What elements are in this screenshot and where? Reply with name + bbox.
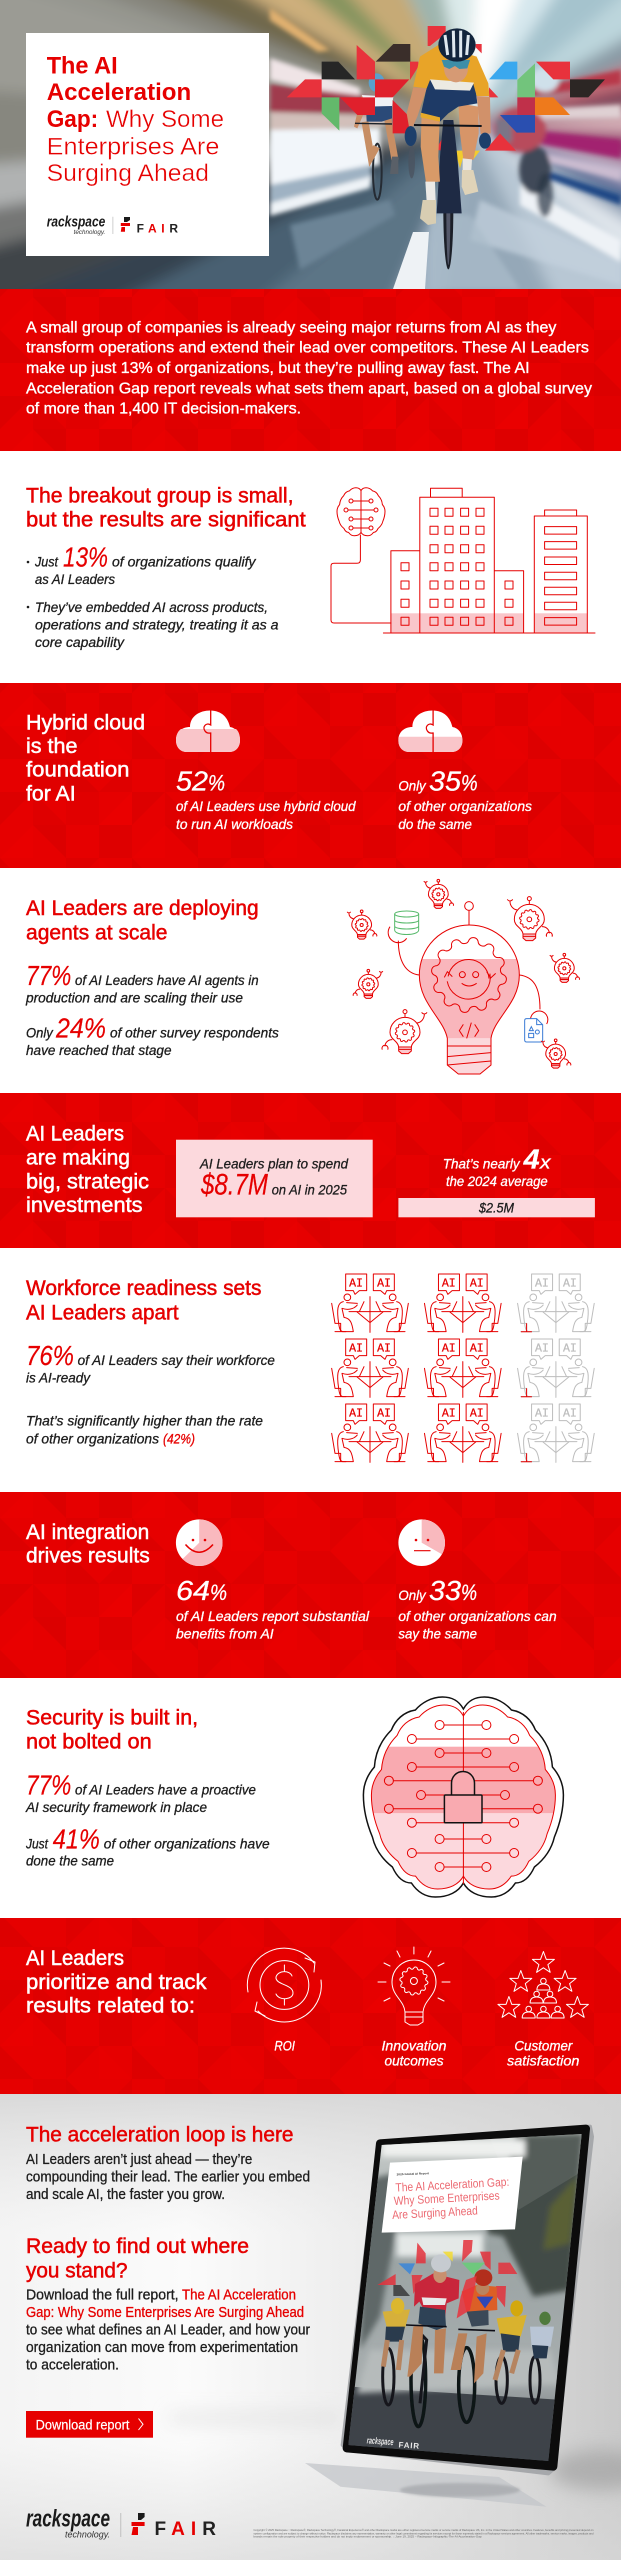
- logos: Rackspace and FAIR: F AI R: [137, 221, 178, 235]
- heading: ready: you stand?: [26, 2259, 128, 2282]
- row 3: AI: [563, 1408, 577, 1421]
- label: customer satisfaction: Customer: [514, 2038, 574, 2054]
- heading: The breakout group is small,: [26, 485, 293, 508]
- row 2: [332, 1339, 594, 1397]
- icon: buildings connected to brain: [331, 488, 595, 633]
- icon: ROI: [247, 1948, 321, 2022]
- row 2: AI: [442, 1343, 456, 1356]
- paragraph: download: organization can move from experimentation: [26, 2340, 298, 2356]
- callout: nearly 4x the 2024 average: [398, 1143, 595, 1217]
- callout: nearly 4x the 2024 average: x: [539, 1152, 552, 1172]
- callout: 8.7M spend: [176, 1140, 373, 1217]
- logos: Rackspace and FAIR: [47, 215, 178, 236]
- stats text: production and are scaling their use: [25, 990, 243, 1006]
- paragraph: download: The AI Acceleration: [182, 2287, 296, 2303]
- bullet list: core capability: [35, 634, 125, 650]
- stat: 52 percent: 52: [176, 766, 208, 797]
- icon: puzzle cloud 52%: [176, 710, 240, 752]
- heading: ready: Ready to find out where: [26, 2235, 249, 2258]
- paragraph: download: Gap: Why Some Enterprises Are Surging Ahead: [26, 2305, 304, 2321]
- heading: ready: [26, 2235, 249, 2282]
- report title card: 2025 Global AI Report: [397, 2171, 429, 2176]
- stats text: have reached that stage: [26, 1042, 172, 1058]
- background rider: left: [354, 73, 415, 200]
- heading: [26, 485, 306, 532]
- stat: 52 percent: [176, 766, 357, 832]
- logos: Rackspace and FAIR: rackspace: [47, 215, 105, 231]
- legal fine print: Copyright © 2025 Rackspace :: Rackspace®, Rackspace Technology®, Fanatical Experience® and other Rackspace marks are either registered service marks or service marks of Rackspace US, Inc. in the United States and other countries. Features, benefits and pricing presented depend on: [254, 2529, 594, 2532]
- stats text: AI security framework in place: [25, 1799, 207, 1815]
- row 1: AI: [470, 1278, 484, 1291]
- row 1: AI: [349, 1278, 363, 1291]
- stats text: (42%): [163, 1430, 195, 1446]
- report title card: The AI Acceleration Gap:: [395, 2175, 510, 2195]
- stats text: Just: [25, 1835, 49, 1851]
- stat: only 35 percent: 35: [429, 766, 461, 797]
- heading: AI integration: [26, 1521, 149, 1544]
- row 2: AI: [563, 1343, 577, 1356]
- heading: Security is built in,: [26, 1706, 198, 1729]
- white road stripe: [393, 232, 429, 289]
- stat: only 33 percent: Only: [398, 1587, 427, 1603]
- report title card: [382, 2157, 523, 2233]
- motion-blur background rays: [0, 0, 621, 310]
- paragraph: download: Download the full report,: [26, 2287, 179, 2303]
- stats text: is AI-ready: [26, 1370, 91, 1386]
- panel: acceleration loop and download: [0, 2094, 621, 2560]
- logos: Rackspace and FAIR: technology.: [74, 230, 105, 236]
- title text: Acceleration: [47, 79, 191, 106]
- stats text: 77%: [26, 960, 71, 991]
- stats text: That’s significantly higher than the rate: [26, 1413, 263, 1429]
- stat: only 33 percent: say the same: [398, 1626, 477, 1642]
- panel: workforce readiness: [0, 1248, 621, 1492]
- heading: big, strategic: [26, 1170, 149, 1193]
- panel: breakout group: [0, 451, 621, 683]
- title text: Enterprises Are: [47, 133, 219, 160]
- label: customer satisfaction: satisfaction: [507, 2053, 580, 2069]
- intro paragraph: transform operations and extend their lead over competitors. These AI Leaders: [26, 340, 589, 357]
- mid-left and right blurred crowd streaks: [270, 8, 621, 289]
- stats text: 77%: [26, 1769, 71, 1800]
- row 2: AI: [377, 1343, 391, 1356]
- stat: 52 percent: %: [208, 771, 225, 796]
- icon: database: [395, 911, 419, 934]
- title text: Surging Ahead: [47, 160, 209, 187]
- stats text: of other organizations: [26, 1430, 159, 1446]
- stat: 64 percent: of AI Leaders report substantial: [176, 1608, 370, 1624]
- panel: security: [25, 1696, 564, 1898]
- callout: 8.7M spend: on AI in 2025: [272, 1181, 347, 1197]
- row 3: AI: [377, 1408, 391, 1421]
- title text: [47, 52, 224, 187]
- heading: AI Leaders are deploying: [26, 897, 259, 920]
- stats text: of other survey respondents: [110, 1025, 279, 1041]
- heading: results related to:: [26, 1995, 195, 2018]
- legal fine print: brands remain the sole property of their respective holders and do not imply endorsement or sponsorship. :: June 19, 2025 – Rackspace-Infographic-The-AI-Acceleration-Gap: [254, 2536, 482, 2539]
- stat: only 35 percent: [398, 766, 532, 832]
- padlock: [444, 1772, 482, 1823]
- heading: acceleration loop: The acceleration loop is here: [26, 2123, 294, 2146]
- callout: nearly 4x the 2024 average: the 2024 average: [446, 1173, 548, 1189]
- heading: AI Leaders: [26, 1122, 124, 1145]
- label: ROI: ROI: [274, 2038, 295, 2054]
- heading: foundation: [26, 759, 130, 782]
- stat: only 35 percent: do the same: [398, 816, 472, 832]
- bar: 2.5M: $2.5M: [478, 1199, 514, 1215]
- button: download report: [26, 2411, 153, 2438]
- row 1: AI: [535, 1278, 549, 1291]
- stats text: of other organizations have: [104, 1835, 270, 1851]
- small agent bulbs: [347, 879, 580, 1068]
- stats text: of AI Leaders have AI agents in: [75, 972, 259, 988]
- title card: [26, 33, 269, 256]
- heading: AI Leaders: [26, 1947, 124, 1970]
- bullet list: 13%: [63, 542, 108, 572]
- stat: only 35 percent: Only: [398, 778, 427, 794]
- heading: [26, 711, 145, 806]
- bar: 2.5M: [398, 1198, 595, 1217]
- intro paragraph: [26, 320, 592, 417]
- row 1: AI: [377, 1278, 391, 1291]
- stats text: [25, 1769, 270, 1869]
- bullet list: They’ve embedded AI across products,: [35, 599, 268, 615]
- bullet list: Just: [34, 554, 59, 570]
- heading: Hybrid cloud: [26, 711, 145, 734]
- stats text: of AI Leaders say their workforce: [78, 1352, 275, 1368]
- icon: innovation bulb: [378, 1947, 450, 2025]
- stat: 64 percent: %: [210, 1580, 227, 1605]
- panel: investments: [0, 1093, 621, 1248]
- icon: lightbulb with agents: [347, 879, 580, 1075]
- back riders: [383, 2298, 554, 2405]
- icon: customer satisfaction stars: [498, 1952, 588, 2018]
- heading: [26, 1277, 261, 1324]
- icon: document: [525, 1019, 543, 1042]
- bullet list: of organizations qualify: [112, 554, 256, 570]
- icon: neutral pie face 33%: [398, 1519, 445, 1566]
- mosaic accent shapes: [377, 2240, 517, 2307]
- heading: [26, 1947, 207, 2018]
- stat: only 35 percent: of other organizations: [398, 798, 532, 814]
- title text: Gap:: [47, 106, 98, 133]
- stat: 64 percent: benefits from AI: [176, 1626, 274, 1642]
- bullet list: operations and strategy, treating it as a: [35, 617, 279, 633]
- bullet list: as AI Leaders: [35, 571, 115, 587]
- callout: nearly 4x the 2024 average: 4: [523, 1143, 540, 1174]
- row 1: AI: [563, 1278, 577, 1291]
- stat: only 33 percent: %: [461, 1580, 477, 1605]
- label: innovation outcomes: Innovation: [382, 2038, 447, 2054]
- row 1: [332, 1274, 594, 1332]
- report cover image: [343, 2130, 587, 2463]
- heading: investments: [26, 1194, 143, 1217]
- stat: 52 percent: to run AI workloads: [176, 816, 293, 832]
- stat: only 35 percent: %: [461, 771, 478, 796]
- paragraph: download: to acceleration.: [26, 2357, 119, 2373]
- paragraph: download: [26, 2287, 310, 2373]
- icon: smiling pie face 64%: [176, 1519, 223, 1566]
- road: [343, 2387, 563, 2463]
- label: innovation outcomes: outcomes: [384, 2053, 444, 2069]
- stats text: done the same: [26, 1853, 114, 1869]
- report logos: FAIR: [398, 2440, 420, 2451]
- heading: agents at scale: [26, 921, 168, 944]
- report title card: Are Surging Ahead: [392, 2204, 478, 2222]
- icon: brain with padlock: [360, 1697, 570, 1903]
- panel: intro: [0, 289, 621, 451]
- tablet device with report cover: [343, 2127, 592, 2473]
- heading: [26, 1706, 198, 1754]
- row 2: AI: [470, 1343, 484, 1356]
- heading: [26, 897, 259, 944]
- mosaic accent shapes: [287, 26, 605, 168]
- tablet floor shadow: [170, 2412, 621, 2507]
- intro paragraph: make up just 13% of organizations, but they’re pulling away fast. The AI: [26, 360, 530, 377]
- title text: The AI: [47, 52, 118, 79]
- row 3: AI: [535, 1408, 549, 1421]
- heading: AI Leaders apart: [26, 1301, 179, 1324]
- icon grid: 6 of 9 meeting pairs highlighted: [332, 1274, 594, 1462]
- button: download report: Download report: [36, 2417, 130, 2432]
- callout: nearly 4x the 2024 average: That’s nearly: [443, 1155, 521, 1171]
- heading: [26, 1122, 149, 1217]
- stat: only 33 percent: of other organizations can: [398, 1608, 557, 1624]
- stats text: [26, 1340, 275, 1446]
- paragraph: [26, 2152, 310, 2203]
- panel: hybrid cloud: [0, 683, 621, 868]
- stats text: 76%: [26, 1340, 74, 1371]
- row 3: AI: [442, 1408, 456, 1421]
- panel: priorities: [0, 1918, 621, 2094]
- legal fine print: system configuration and are subject to change without notice. Rackspace disclaims any representation, warranty or other legal commitment regarding its services except for those expressly stated in a Rackspace services agreement. All other trademarks, service marks, images, products and: [254, 2532, 594, 2535]
- row 2: AI: [349, 1343, 363, 1356]
- callout: 8.7M spend: $8.7M: [200, 1168, 268, 1201]
- footer logos: Rackspace and FAIR: [26, 2506, 216, 2540]
- heading: is the: [26, 735, 78, 758]
- heading: for AI: [26, 783, 76, 806]
- paragraph: and scale AI, the faster you grow.: [26, 2187, 225, 2203]
- trees: [360, 2133, 583, 2350]
- report title card: Why Some Enterprises: [393, 2188, 500, 2208]
- stat: only 33 percent: [398, 1575, 557, 1642]
- paragraph: AI Leaders aren’t just ahead — they’re: [26, 2152, 252, 2168]
- row 1: AI: [442, 1278, 456, 1291]
- front riders: [406, 2254, 497, 2427]
- stats text: 24%: [55, 1013, 106, 1044]
- heading: but the results are significant: [26, 509, 306, 532]
- intro paragraph: A small group of companies is already seeing major returns from AI as they: [26, 320, 557, 337]
- stat: 52 percent: of AI Leaders use hybrid cloud: [176, 798, 357, 814]
- tablet body: [343, 2127, 592, 2473]
- title text: Why Some: [106, 106, 224, 133]
- label: customer satisfaction: [507, 2038, 580, 2069]
- main cyclist: [405, 28, 491, 269]
- panel: agents at scale: [26, 878, 580, 1074]
- heading: drives results: [26, 1545, 150, 1568]
- stats text: of AI Leaders have a proactive: [75, 1781, 256, 1797]
- hero photo: cyclist with motion blur: [0, 0, 621, 310]
- paragraph: compounding their lead. The earlier you embed: [26, 2170, 310, 2186]
- heading: Workforce readiness sets: [26, 1277, 261, 1300]
- row 3: AI: [349, 1408, 363, 1421]
- callout: 8.7M spend: AI Leaders plan to spend: [199, 1155, 349, 1171]
- stats text: 41%: [53, 1823, 100, 1854]
- intro paragraph: of more than 1,400 IT decision-makers.: [26, 400, 301, 417]
- row 3: [332, 1404, 594, 1462]
- heading: [26, 1521, 150, 1568]
- heading: are making: [26, 1146, 130, 1169]
- row 2: AI: [535, 1343, 549, 1356]
- row 3: AI: [470, 1408, 484, 1421]
- footer logos: Rackspace and FAIR: rackspace: [26, 2506, 110, 2533]
- footer logos: Rackspace and FAIR: F AI R: [154, 2519, 216, 2540]
- stat: only 33 percent: 33: [429, 1575, 461, 1606]
- label: innovation outcomes: [382, 2038, 447, 2069]
- stat: 64 percent: 64: [176, 1575, 210, 1606]
- intro paragraph: Acceleration Gap report reveals what sets them apart, based on a global survey: [26, 380, 592, 397]
- stat: 64 percent: [176, 1575, 370, 1642]
- report logos: rackspace: [367, 2435, 394, 2447]
- bullet list: [27, 542, 279, 650]
- panel: AI integration: [0, 1492, 621, 1678]
- paragraph: download: to see what defines an AI Leader, and how your: [26, 2323, 310, 2339]
- stats text: [25, 960, 279, 1058]
- heading: not bolted on: [26, 1731, 152, 1754]
- footer logos: Rackspace and FAIR: technology.: [65, 2529, 110, 2540]
- legal fine print: [254, 2529, 594, 2539]
- icon: puzzle cloud 35%: [398, 710, 462, 752]
- stats text: Only: [26, 1025, 54, 1041]
- heading: prioritize and track: [26, 1971, 207, 1994]
